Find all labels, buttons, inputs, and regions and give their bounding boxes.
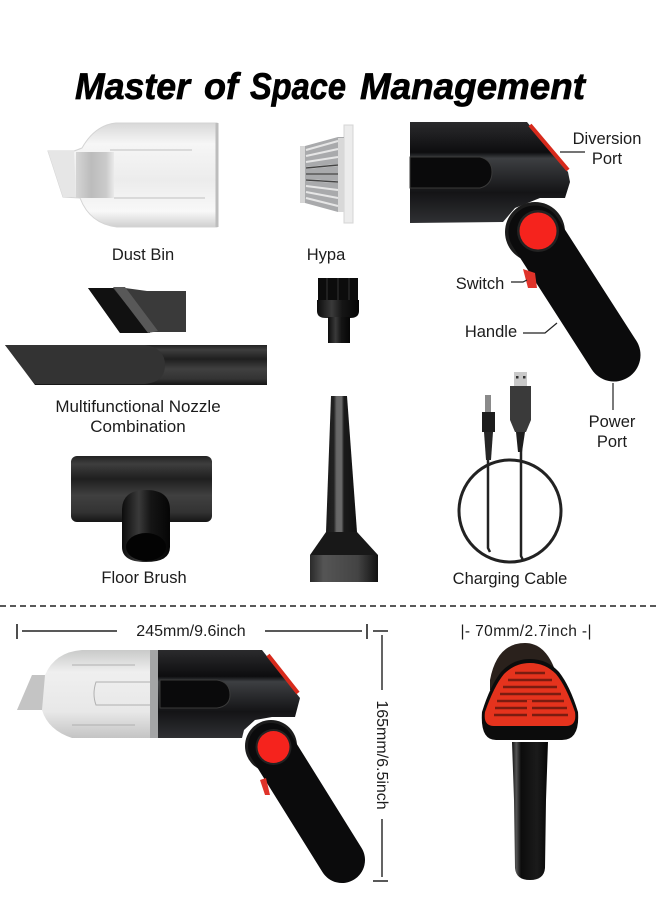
callout: diversion port: Diversion: [573, 130, 641, 148]
callout: handle: [465, 323, 557, 341]
callout: diversion port: [560, 130, 641, 168]
icon: blower cone nozzle: [310, 396, 378, 582]
icon: small round brush: [317, 278, 359, 343]
callout: power port: Port: [597, 433, 628, 451]
icon: short brush nozzle: [88, 287, 186, 333]
width dimension: 245mm: [17, 623, 367, 640]
icon: vacuum rear view: [482, 643, 578, 880]
label: floor brush: Floor Brush: [101, 569, 187, 587]
icon: floor brush: [71, 456, 212, 562]
icon: hypa filter: [300, 125, 353, 223]
icon: dust bin: [48, 123, 217, 227]
callout: diversion port: Port: [592, 150, 623, 168]
icon: labelled vacuum side view: [410, 122, 614, 355]
height dimension: 165mm: 165mm/6.5inch: [373, 700, 390, 810]
divider: [0, 605, 660, 607]
callout: power port: [589, 383, 636, 451]
callout: handle: Handle: [465, 323, 517, 341]
title: Master: [75, 66, 193, 107]
label: multifunctional nozzle combination: Combination: [90, 417, 186, 436]
width dimension: 70mm: |- 70mm/2.7inch -|: [460, 623, 592, 640]
callout: switch: Switch: [456, 275, 504, 293]
icon: long crevice nozzle: [5, 345, 267, 385]
callout: switch: [456, 275, 527, 293]
title: [75, 66, 587, 107]
width dimension: 245mm: 245mm/9.6inch: [136, 623, 246, 640]
label: dust bin: Dust Bin: [112, 246, 174, 264]
title: of: [204, 66, 242, 107]
label: hypa: Hypa: [307, 246, 346, 264]
label: charging cable: Charging Cable: [453, 570, 567, 588]
title: Management: [360, 66, 587, 107]
title: Space: [250, 66, 346, 107]
label: multifunctional nozzle combination: Multifunctional Nozzle: [55, 397, 221, 416]
icon: full vacuum with dust bin: [17, 650, 342, 860]
callout: power port: Power: [589, 413, 635, 431]
height dimension: 165mm: [373, 631, 390, 881]
icon: charging cable: [459, 372, 561, 562]
